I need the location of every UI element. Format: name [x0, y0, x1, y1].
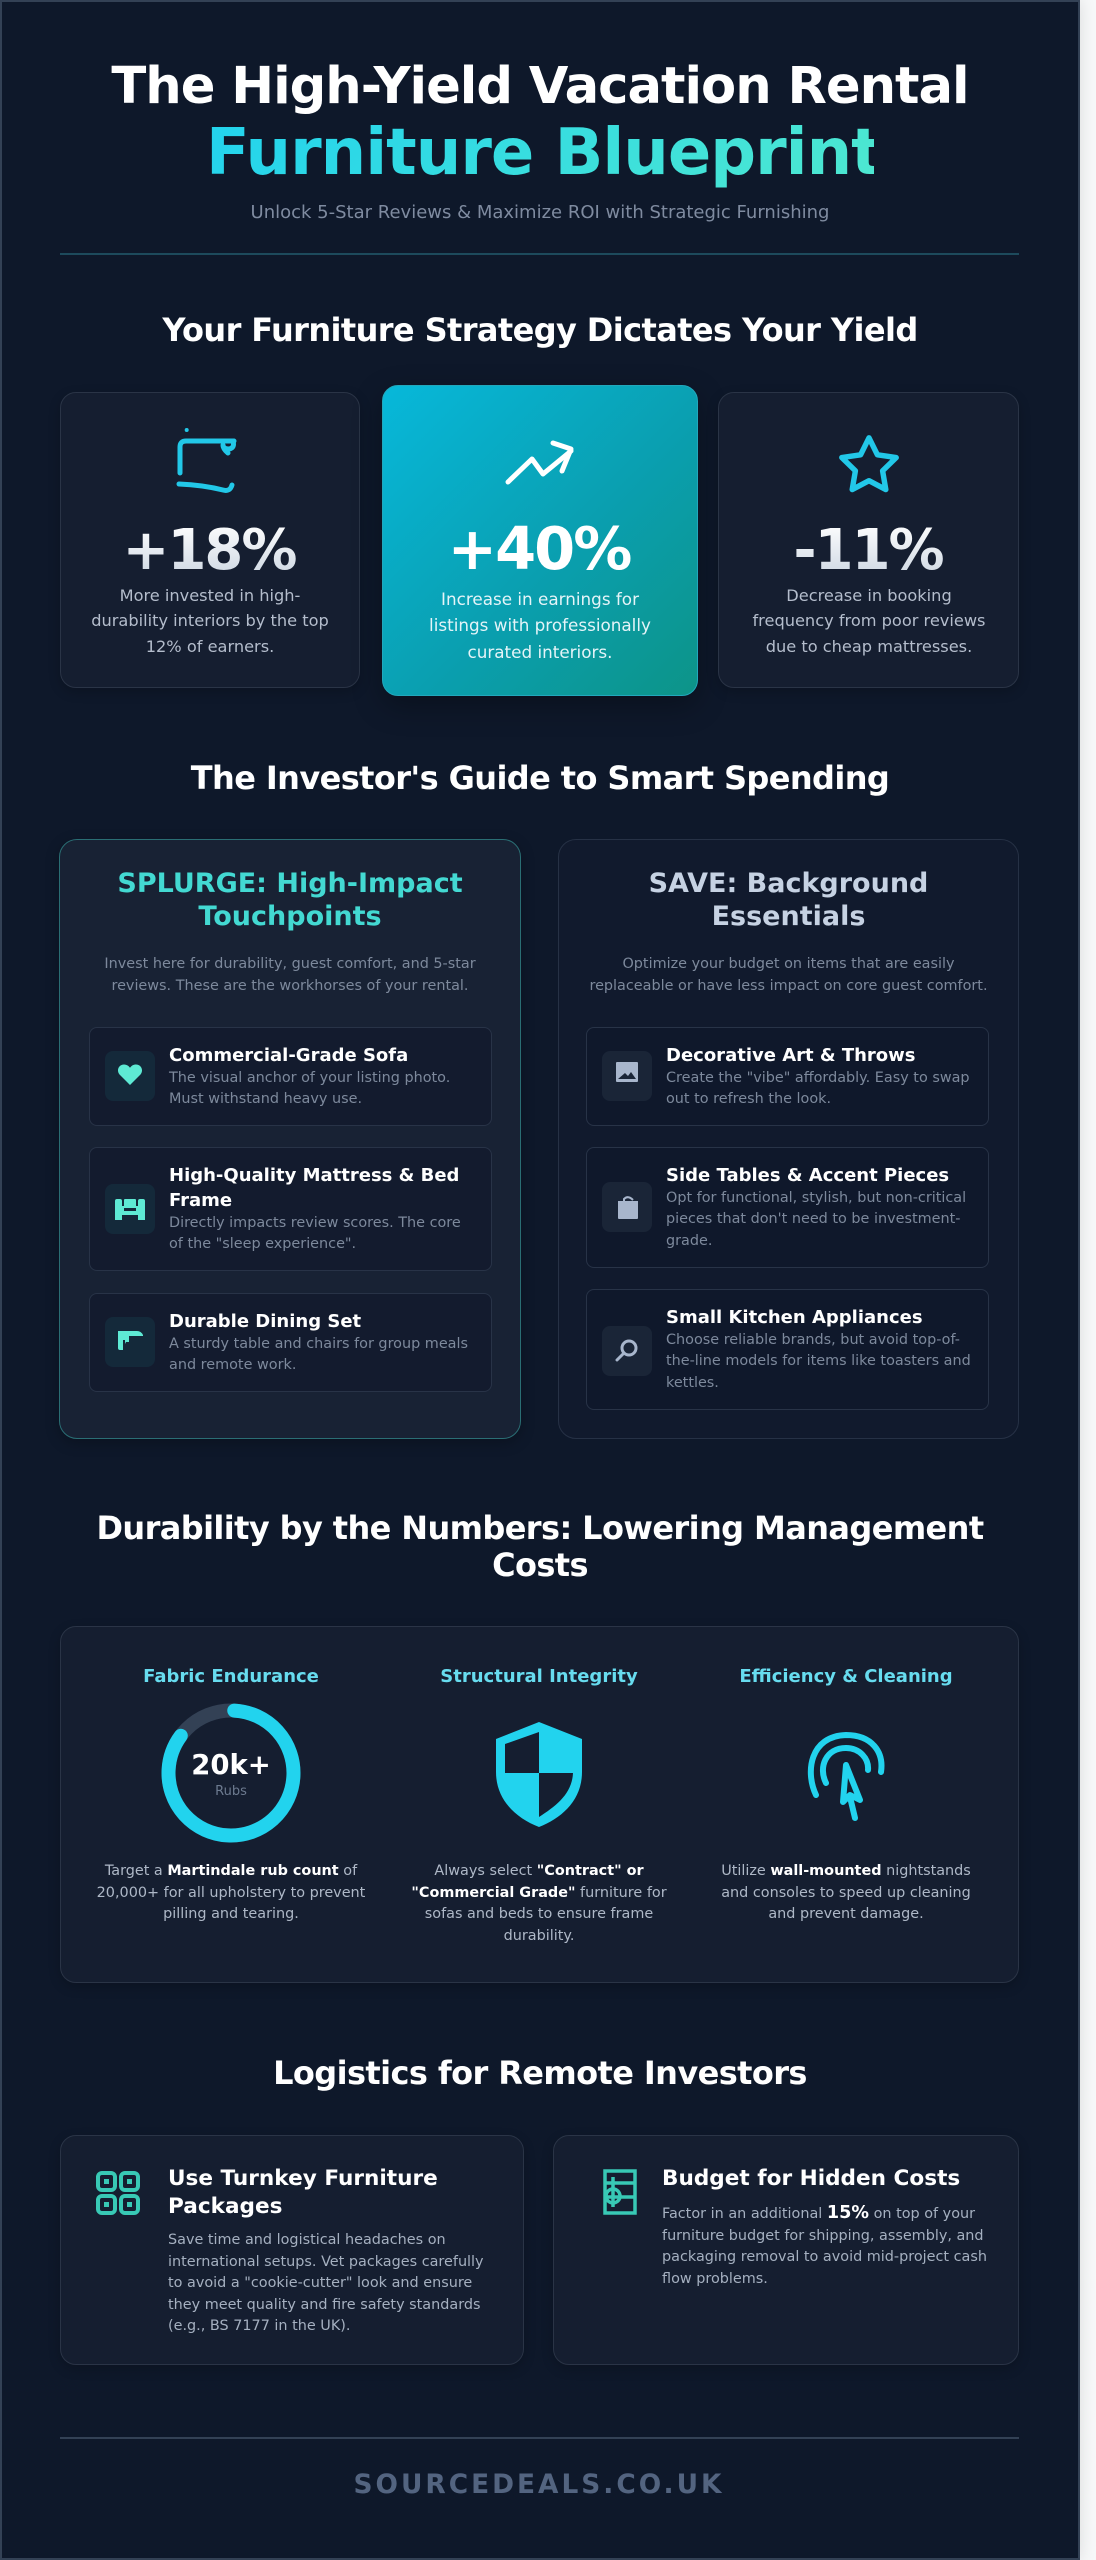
icon: cursor click [808, 1732, 884, 1821]
card text: packaging removal to avoid mid-project cash [662, 2249, 987, 2265]
card text: Save time and logistical headaches on [168, 2232, 446, 2248]
splurge intro [104, 956, 476, 994]
item text: Commercial-Grade Sofa [169, 1045, 408, 1066]
item: decor: Create the "vibe" affordably. Easy to swap [666, 1070, 970, 1086]
item: dining: A sturdy table and chairs for group meals [169, 1336, 468, 1352]
icon: shield [496, 1722, 582, 1827]
stat description: More invested in high- [120, 586, 300, 605]
column text [411, 1863, 667, 1944]
heading: logistics: Logistics for Remote Investors [273, 2054, 807, 2092]
heading: durability: Costs [492, 1546, 588, 1584]
stat description: curated interiors. [468, 642, 612, 662]
column: structural integrity [411, 1666, 667, 1944]
card text: Factor in an additional 15% on top of your [662, 2203, 975, 2223]
item text: Side Tables & Accent Pieces [666, 1165, 949, 1186]
card: hidden costs [553, 2135, 1019, 2365]
icon: budget sheet [603, 2169, 637, 2215]
item: sofa: The visual anchor of your listing photo. [169, 1070, 450, 1086]
column text: Utilize wall-mounted nightstands [721, 1863, 971, 1879]
icon: picture [602, 1051, 652, 1101]
icon: magnifier [602, 1326, 652, 1376]
heading: durability: Durability by the Numbers: Lowering Management [96, 1509, 984, 1547]
card text: furniture budget for shipping, assembly, and [662, 2228, 984, 2244]
card title: Packages [168, 2194, 283, 2219]
item: kitchen: Choose reliable brands, but avoid top-of- [666, 1332, 960, 1348]
save intro [589, 956, 988, 994]
column text [721, 1863, 971, 1922]
panel: splurge [59, 839, 521, 1439]
item text [169, 1165, 459, 1211]
card text: to avoid a "cookie-cutter" look and ensure [168, 2275, 472, 2291]
column text: and consoles to speed up cleaning [721, 1885, 971, 1901]
stat description [91, 586, 329, 656]
ring value: 20k+ [191, 1749, 271, 1781]
item: dining [89, 1293, 492, 1392]
column heading: Structural Integrity [440, 1666, 638, 1687]
item text: Durable Dining Set [169, 1311, 361, 1332]
card text [168, 2232, 484, 2334]
column text: sofas and beds to ensure frame [425, 1906, 653, 1922]
splurge heading: SPLURGE: High-Impact [117, 868, 463, 899]
item: kitchen [586, 1289, 989, 1410]
item: decor: out to refresh the look. [666, 1091, 831, 1107]
card title [168, 2166, 438, 2219]
heading: strategy: Your Furniture Strategy Dictates Your Yield [162, 311, 918, 349]
icon: heart [105, 1051, 155, 1101]
save intro: Optimize your budget on items that are easily [622, 956, 955, 972]
stat value: +18% [123, 518, 295, 583]
stat description [429, 589, 651, 662]
panel: durability [60, 1626, 1019, 1983]
item: kitchen: the-line models for items like toasters and [666, 1353, 971, 1369]
save intro: replaceable or have less impact on core guest comfort. [589, 978, 988, 994]
stat description: due to cheap mattresses. [766, 637, 972, 656]
item text: Decorative Art & Throws [666, 1045, 916, 1066]
icon: sofa outline [176, 428, 236, 493]
column text: "Commercial Grade" furniture for [411, 1885, 667, 1901]
item text: Small Kitchen Appliances [666, 1307, 923, 1328]
stat value [60, 521, 358, 581]
title highlight: Furniture Blueprint [206, 116, 881, 190]
icon: trending up [506, 440, 574, 484]
icon: bed [105, 1184, 155, 1234]
card text: (e.g., BS 7177 in the UK). [168, 2318, 350, 2334]
ring unit: Rubs [215, 1784, 247, 1799]
item: kitchen: kettles. [666, 1375, 719, 1391]
item: decor [586, 1027, 989, 1126]
item text: Frame [169, 1190, 232, 1211]
ring chart: 20k+ rubs [162, 1704, 300, 1842]
stat card: +40% highlighted [382, 385, 698, 696]
stat description: listings with professionally [429, 615, 651, 635]
heading: smart spending: The Investor's Guide to Smart Spending [191, 759, 889, 797]
stat value: +40% [448, 514, 630, 583]
stat description: 12% of earners. [146, 637, 274, 656]
item: sofa [89, 1027, 492, 1126]
card text [662, 2203, 987, 2287]
save heading [649, 868, 928, 932]
card text: they meet quality and fire safety standards [168, 2297, 480, 2313]
column text: 20,000+ for all upholstery to prevent [97, 1885, 365, 1901]
column text: Always select "Contract" or [434, 1863, 644, 1879]
title: The High-Yield Vacation Rental [111, 56, 969, 116]
stat description: Decrease in booking [786, 586, 952, 605]
item: mattress: Directly impacts review scores. The core [169, 1214, 461, 1230]
splurge intro: Invest here for durability, guest comfort, and 5-star [104, 956, 476, 972]
stat description: Increase in earnings for [441, 589, 639, 609]
item: mattress [89, 1147, 492, 1271]
save heading: Essentials [712, 901, 865, 932]
icon: grid [96, 2171, 140, 2215]
column text: and prevent damage. [768, 1906, 924, 1922]
save heading: SAVE: Background [649, 868, 928, 899]
item: side tables: grade. [666, 1233, 712, 1249]
footer brand: SOURCEDEALS.CO.UK [354, 2469, 724, 2500]
splurge intro: reviews. These are the workhorses of your rental. [111, 978, 469, 994]
stat card: -11% [718, 392, 1019, 688]
item: side tables: Opt for functional, stylish, but non-critical [666, 1190, 966, 1206]
card title: Budget for Hidden Costs [662, 2166, 960, 2191]
stat description [752, 586, 986, 656]
column text: pilling and tearing. [163, 1906, 299, 1922]
item: dining: and remote work. [169, 1357, 296, 1373]
stat value: -11% [793, 518, 943, 583]
item text: High-Quality Mattress & Bed [169, 1165, 459, 1186]
card: turnkey packages [60, 2135, 524, 2365]
stat value [719, 521, 1017, 581]
item: side tables: pieces that don't need to be investment- [666, 1211, 960, 1227]
item: side tables [586, 1147, 989, 1268]
column: efficiency and cleaning [721, 1666, 971, 1922]
card text: flow problems. [662, 2271, 768, 2287]
column: fabric endurance [97, 1666, 365, 1922]
column heading: Efficiency & Cleaning [739, 1666, 953, 1687]
icon: dining chair [105, 1317, 155, 1367]
column text: Target a Martindale rub count of [105, 1863, 357, 1879]
icon: bag [602, 1182, 652, 1232]
column heading: Fabric Endurance [143, 1666, 319, 1687]
splurge heading [117, 868, 463, 932]
column text: durability. [504, 1928, 574, 1944]
stat description: frequency from poor reviews [752, 611, 986, 630]
panel: save [558, 839, 1019, 1439]
item: mattress: of the "sleep experience". [169, 1236, 356, 1252]
subtitle: Unlock 5-Star Reviews & Maximize ROI with Strategic Furnishing [251, 202, 829, 223]
stat description: durability interiors by the top [91, 611, 329, 630]
card text: international setups. Vet packages carefully [168, 2254, 484, 2270]
item: sofa: Must withstand heavy use. [169, 1091, 362, 1107]
stat card: +18% [60, 392, 360, 688]
heading: durability [96, 1509, 984, 1584]
splurge heading: Touchpoints [198, 901, 382, 932]
column text [97, 1863, 365, 1922]
card title: Use Turnkey Furniture [168, 2166, 438, 2191]
icon: star [839, 435, 899, 492]
